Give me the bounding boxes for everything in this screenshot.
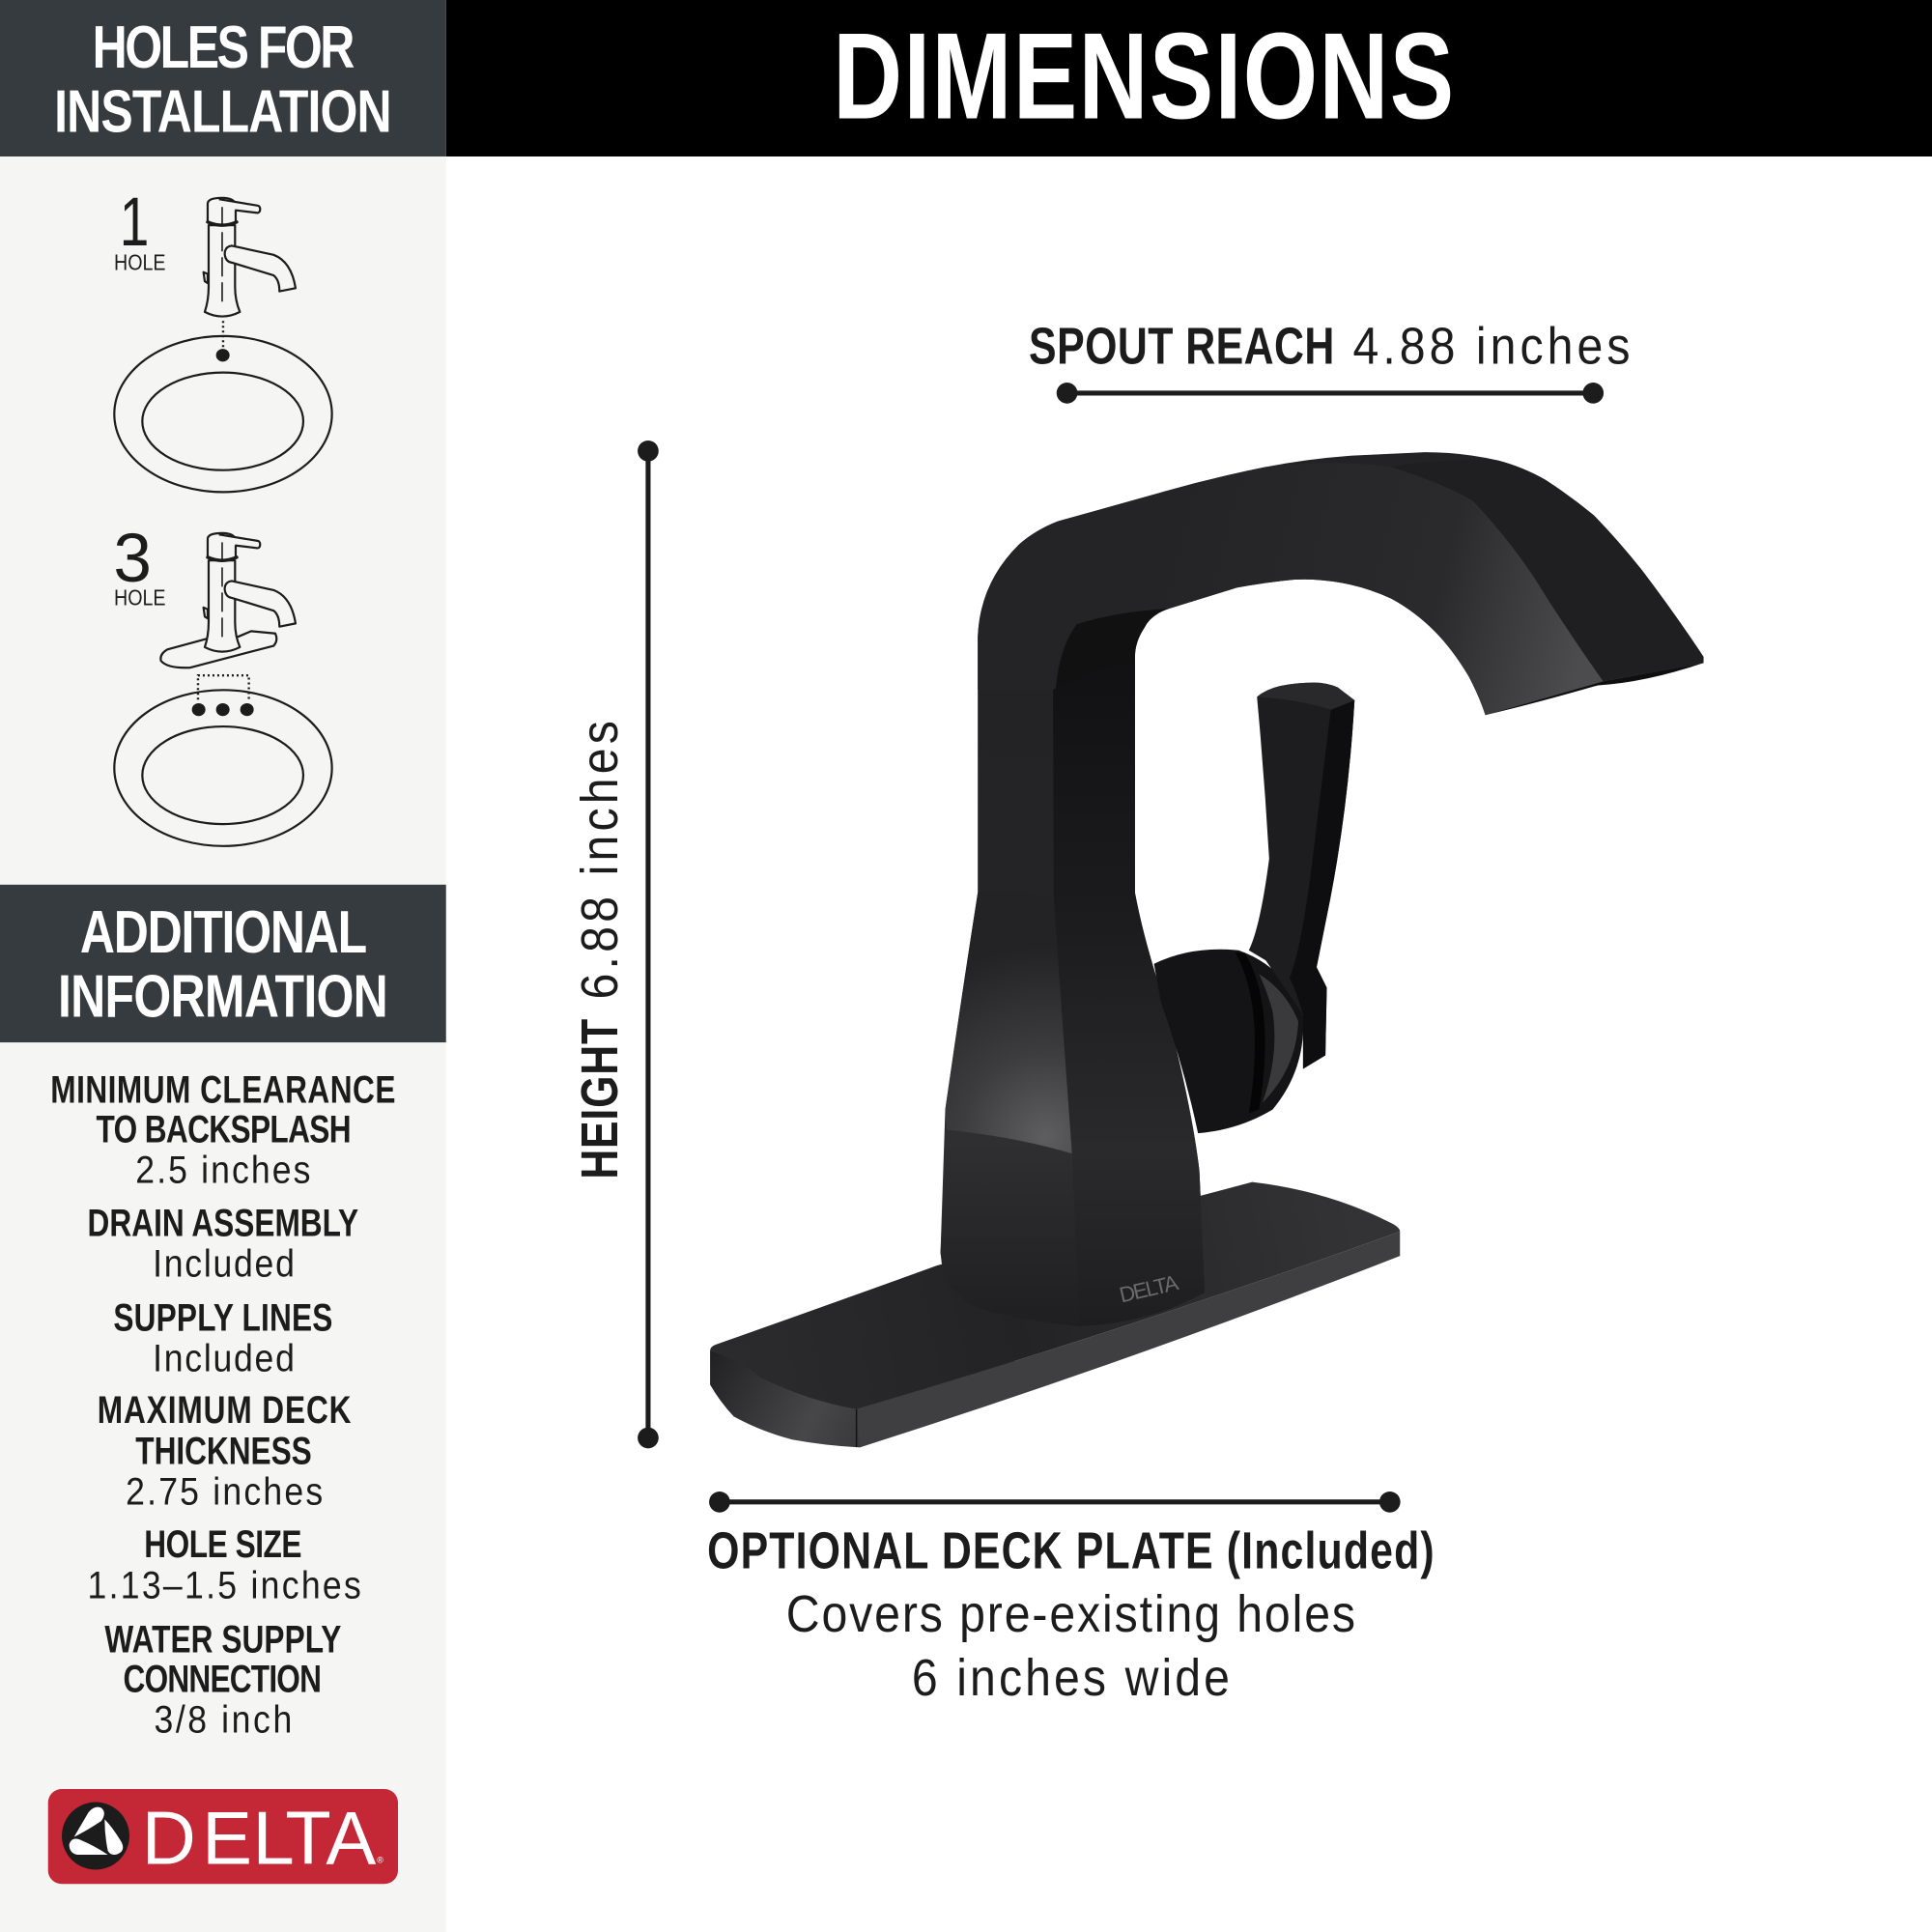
spec: minimum clearance: 2.5 inches [135, 1149, 310, 1191]
header: additional information: INFORMATION [58, 962, 388, 1030]
arrow: height dimension line [638, 440, 659, 1448]
label: height: HEIGHT [572, 1019, 629, 1179]
header: additional information: ADDITIONAL [80, 898, 367, 965]
label: height [571, 721, 629, 1179]
label: spout reach: 4.88 inches [1353, 317, 1631, 375]
spec: hole size: 1.13–1.5 inches [88, 1564, 361, 1606]
icon: 1 hole label: 1 [120, 184, 149, 261]
icon: 1 hole label [114, 184, 166, 274]
spec: hole size: HOLE SIZE [144, 1523, 302, 1566]
arch shadow [1056, 609, 1169, 696]
spec: maximum deck thickness: 2.75 inches [126, 1470, 323, 1513]
label: optional deck plate: Covers pre-existing holes [786, 1584, 1355, 1642]
handle lever [1249, 683, 1354, 1069]
spec: maximum deck thickness [98, 1389, 352, 1513]
title: DIMENSIONS [833, 8, 1454, 145]
spec: maximum deck thickness: THICKNESS [135, 1430, 312, 1472]
product: faucet [710, 452, 1704, 1447]
icon: 3 hole label: HOLE [114, 584, 166, 610]
spec: supply lines: SUPPLY LINES [113, 1296, 332, 1339]
spout front face [978, 463, 1604, 715]
arrow: spout reach dimension line [1057, 383, 1604, 404]
spec: water supply connection: 3/8 inch [154, 1698, 292, 1741]
spec: hole size [88, 1523, 361, 1606]
header: holes for installation [0, 0, 446, 156]
body lit face [946, 891, 1072, 1153]
handle hub [1154, 950, 1303, 1133]
panel: left sidebar [0, 0, 446, 1932]
logo: delta [48, 1789, 398, 1884]
deck plate [710, 1182, 1400, 1447]
spec: minimum clearance: MINIMUM CLEARANCE [50, 1068, 395, 1111]
nozzle [1486, 663, 1704, 715]
icon: 3 hole label: 3 [113, 520, 152, 597]
label: optional deck plate [707, 1522, 1435, 1707]
spec: drain assembly: Included [153, 1242, 295, 1285]
label: optional deck plate: 6 inches wide [912, 1649, 1230, 1707]
spec: drain assembly [88, 1202, 358, 1285]
icon: 1 hole faucet and sink [114, 198, 332, 492]
spec: supply lines: Included [153, 1337, 295, 1379]
header: holes for installation: INSTALLATION [54, 77, 392, 145]
label: spout reach: SPOUT REACH [1029, 318, 1334, 375]
icon: 3 hole faucet, plate and sink [114, 533, 332, 846]
spout side face [1391, 460, 1704, 681]
faucet body and spout [941, 452, 1704, 1326]
spec: supply lines [113, 1296, 332, 1379]
logo: delta: ® [377, 1856, 384, 1865]
front column [1053, 657, 1205, 1326]
spec: water supply connection [104, 1618, 341, 1741]
label: spout reach [1029, 317, 1631, 375]
arrow: deck plate dimension line [709, 1492, 1401, 1513]
header: dimensions banner [446, 0, 1932, 156]
spec: water supply connection: CONNECTION [124, 1658, 322, 1700]
brand mark on faucet: DELTA [1117, 1270, 1180, 1307]
spec: maximum deck thickness: MAXIMUM DECK [98, 1389, 352, 1432]
spec: water supply connection: WATER SUPPLY [104, 1618, 341, 1661]
header: additional information [0, 885, 446, 1042]
logo: delta: DELTA [142, 1797, 376, 1880]
label: height: 6.88 inches [571, 721, 629, 999]
spec: drain assembly: DRAIN ASSEMBLY [88, 1202, 358, 1244]
header: holes for installation: HOLES FOR [93, 14, 355, 80]
spec: minimum clearance: TO BACKSPLASH [96, 1108, 352, 1151]
icon: 1 hole label: HOLE [114, 249, 166, 274]
icon: 3 hole label [113, 520, 166, 610]
label: optional deck plate: OPTIONAL DECK PLATE (Included) [707, 1522, 1435, 1580]
spec: minimum clearance [50, 1068, 395, 1191]
body lower band [941, 1130, 1079, 1326]
